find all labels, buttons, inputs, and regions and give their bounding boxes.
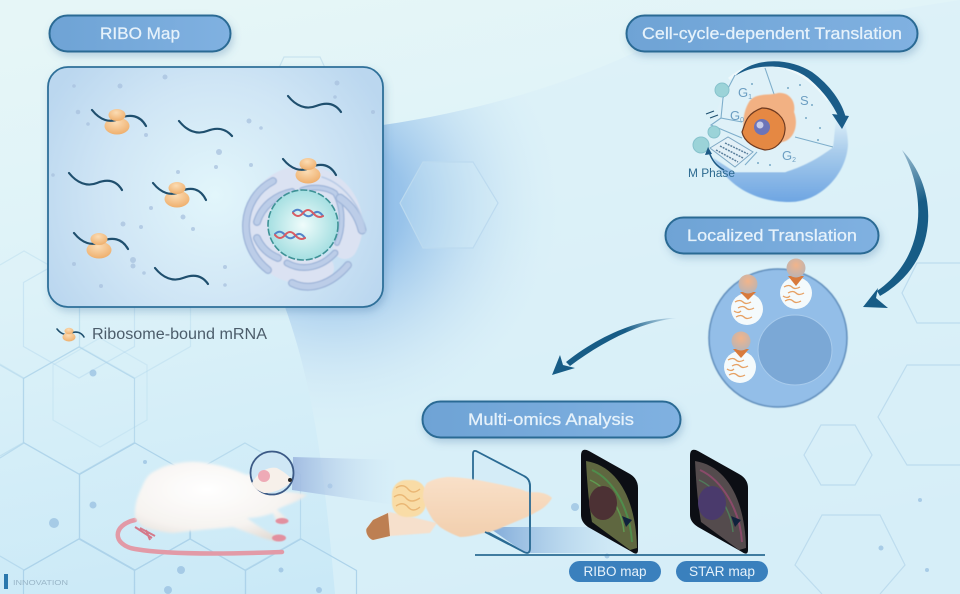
RIBO map brain slice bbox=[581, 450, 638, 554]
floating particles bbox=[51, 74, 375, 288]
DNA helices bbox=[275, 210, 323, 239]
ribosome-bound mRNA 3 bbox=[74, 233, 128, 258]
label: RIBO map bbox=[569, 561, 661, 582]
phase label G2: G bbox=[782, 148, 792, 163]
cycle arrow bbox=[705, 61, 849, 170]
legend: Ribosome-bound mRNA bbox=[57, 326, 268, 343]
white rim bbox=[729, 65, 828, 100]
translation site 1 bbox=[731, 274, 763, 325]
rat bbox=[118, 452, 307, 554]
translation site 3 bbox=[724, 332, 756, 383]
cell body bbox=[709, 269, 847, 407]
phase label S: S bbox=[800, 93, 809, 108]
phase label G1: G bbox=[738, 85, 748, 100]
M phase grid bbox=[710, 137, 753, 167]
baseline bbox=[475, 554, 765, 556]
panel box bbox=[48, 67, 383, 307]
pill heading: Cell-cycle-dependent Translation: Cell-cycle-dependent Translation bbox=[642, 24, 902, 43]
localized translation cell bbox=[709, 258, 847, 407]
imaging plane back bbox=[473, 451, 530, 553]
ribosome-bound mRNA 2 bbox=[153, 182, 206, 208]
zoom beam from rat to brain bbox=[292, 457, 400, 505]
hind paw bbox=[135, 527, 155, 540]
cell division markers bbox=[693, 83, 729, 153]
pill heading: Localized Translation bbox=[666, 218, 878, 254]
tail bbox=[118, 520, 282, 554]
legend label: Ribosome-bound mRNA bbox=[92, 326, 268, 343]
cerebellum bbox=[392, 480, 426, 517]
brainstem bbox=[366, 512, 437, 540]
sphere cut face bbox=[711, 66, 834, 172]
translation site 2 bbox=[780, 258, 812, 309]
nucleus bbox=[268, 190, 338, 260]
sphere rim and crescent bbox=[713, 63, 848, 202]
label: RIBO map: RIBO map bbox=[584, 564, 646, 579]
cycle dots bbox=[751, 83, 821, 166]
legend icon bbox=[57, 328, 84, 342]
phase label G0: 0 bbox=[740, 117, 744, 124]
endoplasmic reticulum bbox=[246, 177, 365, 287]
imaging plane front edge bbox=[485, 476, 530, 553]
ribosome-bound mRNA 1 bbox=[92, 109, 146, 134]
STAR map brain slice bbox=[690, 450, 748, 554]
label: STAR map: STAR map bbox=[689, 564, 755, 579]
pill heading: Cell-cycle-dependent Translation bbox=[626, 16, 918, 52]
free mRNA strands bbox=[69, 96, 341, 284]
pill heading: Localized Translation: Localized Translation bbox=[687, 226, 857, 245]
phase label M Phase: M Phase bbox=[688, 168, 735, 180]
phase label G2: 2 bbox=[792, 157, 796, 164]
body bbox=[135, 462, 307, 541]
arrow: localized translation to multi-omics bbox=[552, 318, 677, 375]
cycle segment lines bbox=[711, 68, 833, 165]
pill heading: RIBO Map bbox=[50, 16, 230, 52]
brain bbox=[366, 477, 552, 540]
background dots bbox=[49, 370, 929, 594]
cerebrum bbox=[423, 477, 552, 537]
pill heading: Multi-omics Analysis: Multi-omics Analysis bbox=[468, 410, 634, 429]
magnified head bbox=[250, 452, 294, 494]
label: STAR map bbox=[676, 561, 768, 582]
phase label G0: G bbox=[730, 108, 740, 123]
front paws bbox=[272, 518, 288, 542]
pill heading: RIBO Map: RIBO Map bbox=[100, 24, 180, 43]
shadow of plane to slices bbox=[488, 527, 640, 553]
ribosome-bound mRNA 4 bbox=[283, 158, 336, 184]
cell-cycle sphere illustration bbox=[688, 61, 849, 202]
centre hexagon bbox=[400, 162, 498, 248]
perspective fan base bbox=[285, 0, 960, 594]
cell nucleus bbox=[758, 315, 832, 385]
arrow: cell cycle to localized translation bbox=[863, 150, 928, 308]
panel: RIBO map bbox=[48, 67, 383, 307]
footer logo: INNOVATION bbox=[4, 574, 68, 589]
footer logo: INNOVATION: INNOVATION bbox=[13, 578, 68, 587]
phase label G1: 1 bbox=[748, 94, 752, 101]
perspective fan from panel bbox=[285, 50, 760, 594]
pill heading: Multi-omics Analysis bbox=[422, 402, 680, 438]
orange cell bbox=[742, 93, 796, 150]
